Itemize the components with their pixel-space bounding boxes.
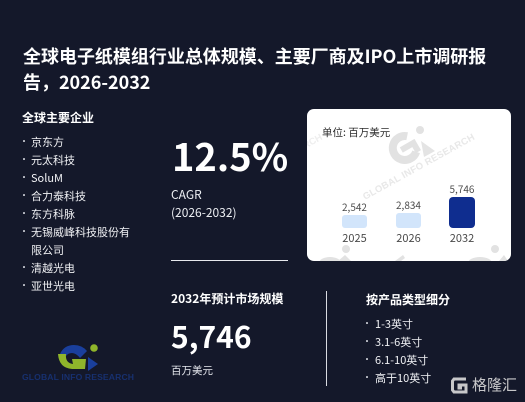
year labels: 2025	[342, 230, 367, 246]
logo: Gelonghui watermark	[451, 374, 517, 395]
company list: SoluM	[31, 170, 63, 186]
panel: product type	[366, 291, 450, 386]
year labels: 2032	[450, 230, 474, 246]
CAGR label	[171, 186, 237, 221]
company list: 合力泰科技	[31, 188, 86, 204]
watermark	[307, 126, 508, 261]
company list: 清越光电	[31, 260, 75, 276]
CAGR label: CAGR	[171, 186, 202, 203]
bar 2025	[342, 215, 367, 228]
logo: Global Info Research	[22, 344, 134, 382]
product type list: 高于10英寸	[375, 370, 431, 386]
CAGR label: (2026-2032)	[171, 204, 237, 221]
heading: product type: 按产品类型细分	[366, 291, 450, 308]
value labels: 2,542	[342, 199, 367, 214]
company list: 东方科脉	[31, 206, 75, 222]
panel: major companies	[22, 109, 130, 294]
company list: 限公司	[31, 242, 64, 258]
divider	[171, 260, 288, 261]
value labels	[342, 181, 474, 214]
heading: major companies: 全球主要企业	[22, 109, 94, 126]
bar 2026	[396, 213, 421, 228]
company list: 元太科技	[31, 152, 75, 168]
logo: Gelonghui watermark: 格隆汇	[472, 374, 517, 395]
company list: 无锡威峰科技股份有	[31, 224, 130, 240]
company list: 亚世光电	[31, 278, 75, 294]
panel: bar chart card	[307, 109, 511, 261]
year labels: 2026	[396, 230, 421, 246]
forecast unit: 百万美元	[171, 363, 213, 378]
company list: 京东方	[31, 134, 64, 150]
year labels	[342, 230, 474, 246]
product type list: 3.1-6英寸	[375, 334, 422, 350]
value labels: 5,746	[450, 181, 474, 196]
forecast value: 5,746	[171, 313, 252, 357]
unit label: 单位: 百万美元	[322, 125, 390, 140]
product type list: 1-3英寸	[375, 316, 413, 332]
heading: 2032 forecast: 2032年预计市场规模	[171, 290, 283, 307]
logo: Global Info Research: GLOBAL INFO RESEARCH	[22, 372, 134, 382]
product type list: 6.1-10英寸	[375, 352, 428, 368]
product type list	[366, 316, 431, 386]
company list	[23, 134, 130, 294]
CAGR value: 12.5%	[172, 127, 288, 182]
value labels: 2,834	[396, 197, 421, 212]
vertical divider	[326, 291, 327, 386]
title: 全球电子纸模组行业总体规模、主要厂商及IPO上市调研报告，2026-2032	[23, 42, 486, 94]
watermark: GLOBAL INFO RESEARCH	[361, 132, 477, 203]
bar 2032	[449, 197, 475, 228]
bar chart	[342, 181, 475, 246]
